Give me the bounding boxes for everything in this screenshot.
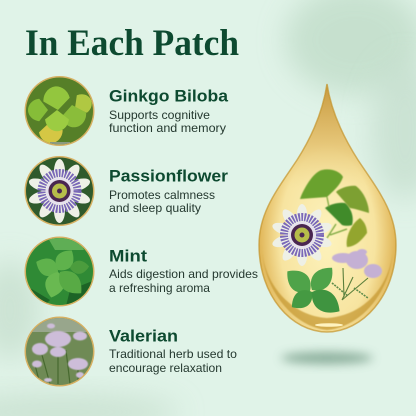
name: Ginkgo Biloba [109,86,229,106]
name: Mint [109,246,147,266]
item: ginkgo biloba: function and memory [109,122,226,135]
item: mint: a refreshing aroma [109,282,211,295]
title: In Each Patch [25,23,239,64]
icon: valerian flowers [24,316,95,386]
description: Supports cognitive [109,109,210,122]
name: Valerian [109,326,178,346]
item: valerian [24,316,237,386]
icon: mint leaves [24,236,95,310]
item: ginkgo biloba [24,76,229,148]
item: mint [24,236,258,310]
item: passionflower: and sleep quality [109,202,201,215]
ginkgo leaves [300,169,369,247]
valerian flowers [332,249,382,300]
icon: passionflower [24,156,95,226]
drop shadow [281,352,373,364]
passionflower [271,204,333,266]
item: passionflower [24,156,228,226]
icon: ginkgo leaves [24,76,96,148]
name: Passionflower [109,166,228,186]
description: Promotes calmness [109,189,215,202]
item: valerian: encourage relaxation [109,362,222,375]
description: Aids digestion and provides [109,268,258,281]
description: Traditional herb used to [109,348,237,361]
mint leaves [281,262,345,320]
oil drop [259,84,396,332]
